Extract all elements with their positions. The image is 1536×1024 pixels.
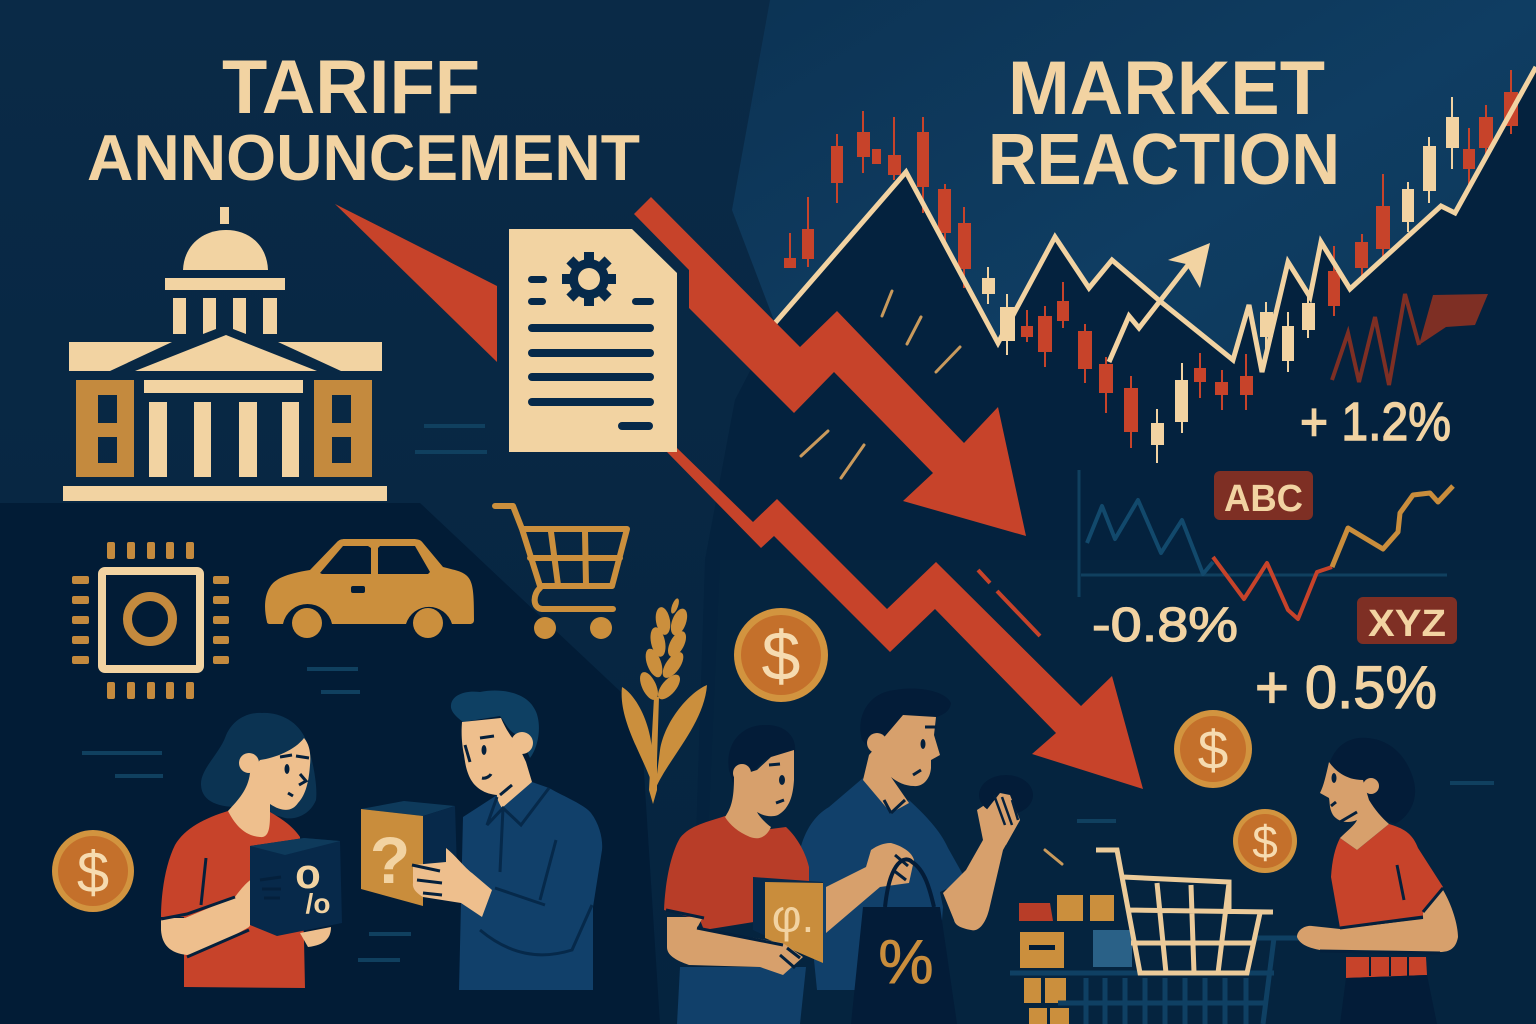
impact ticks	[801, 291, 1062, 864]
percent box: o	[295, 850, 321, 897]
coin: right upper: $	[1198, 719, 1228, 781]
stat: plus 0.5 percent: + 0.5%	[1255, 654, 1437, 721]
icon: policy document	[509, 229, 677, 452]
title: tariff announcement: ANNOUNCEMENT	[87, 121, 640, 194]
shopping bag	[851, 859, 957, 1024]
market trend line	[775, 67, 1536, 372]
person: woman with percent box	[161, 713, 342, 988]
stat: minus 0.8 percent: -0.8%	[1092, 599, 1238, 652]
ticker label: abc: ABC	[1224, 478, 1303, 520]
coin: right upper	[1174, 710, 1252, 788]
candlestick chart	[784, 70, 1518, 463]
line chart: abc and xyz	[1079, 470, 1453, 619]
groceries	[1019, 895, 1132, 1024]
gear	[562, 252, 616, 306]
stat: plus 1.2 percent: + 1.2%	[1300, 392, 1451, 452]
icon: car	[265, 539, 474, 638]
person: man in blue with bag	[800, 689, 1033, 1024]
book	[753, 877, 823, 963]
person: man in red with book	[664, 725, 823, 1024]
red wedge arrow tail	[335, 204, 497, 362]
coin: right lower	[1233, 809, 1297, 873]
coin: lower left	[52, 830, 134, 912]
title: market reaction	[988, 46, 1340, 200]
title: tariff announcement: TARIFF	[222, 45, 480, 130]
lower blue basket	[1010, 938, 1314, 1024]
icon: shopping cart	[495, 506, 627, 639]
question mark box: ?	[370, 823, 410, 897]
upper cream basket	[1096, 850, 1273, 973]
icon: wheat	[622, 597, 707, 804]
percent box: /o	[306, 888, 330, 919]
lower zigzag down arrow	[667, 448, 1143, 789]
person: woman at cart	[1297, 738, 1458, 1024]
cream candles	[982, 97, 1459, 463]
red speed ticks	[978, 570, 1040, 636]
faint motion dashes	[82, 426, 1494, 960]
title: market reaction: REACTION	[988, 120, 1340, 200]
icon: government building	[63, 207, 387, 501]
small rising arrow	[1109, 243, 1210, 362]
icon: microchip	[72, 542, 229, 699]
person: man with question box	[361, 691, 602, 990]
coin: right lower: $	[1252, 816, 1278, 868]
question mark box	[361, 801, 457, 906]
percent box	[250, 838, 342, 936]
coin: center	[734, 608, 828, 702]
upper zigzag down arrow	[634, 197, 1026, 536]
shopping cart with groceries	[1010, 850, 1314, 1024]
coin: center: $	[762, 617, 800, 695]
title: market reaction: MARKET	[1008, 46, 1325, 131]
ticker label: xyz: XYZ	[1368, 603, 1446, 645]
title: tariff announcement	[87, 45, 640, 194]
coin: lower left: $	[77, 840, 109, 905]
red candles	[784, 70, 1518, 448]
shopping bag: %	[878, 928, 934, 997]
book: φ.	[772, 890, 814, 942]
maroon mini chart	[1332, 294, 1488, 385]
ticker label: xyz	[1357, 597, 1457, 645]
